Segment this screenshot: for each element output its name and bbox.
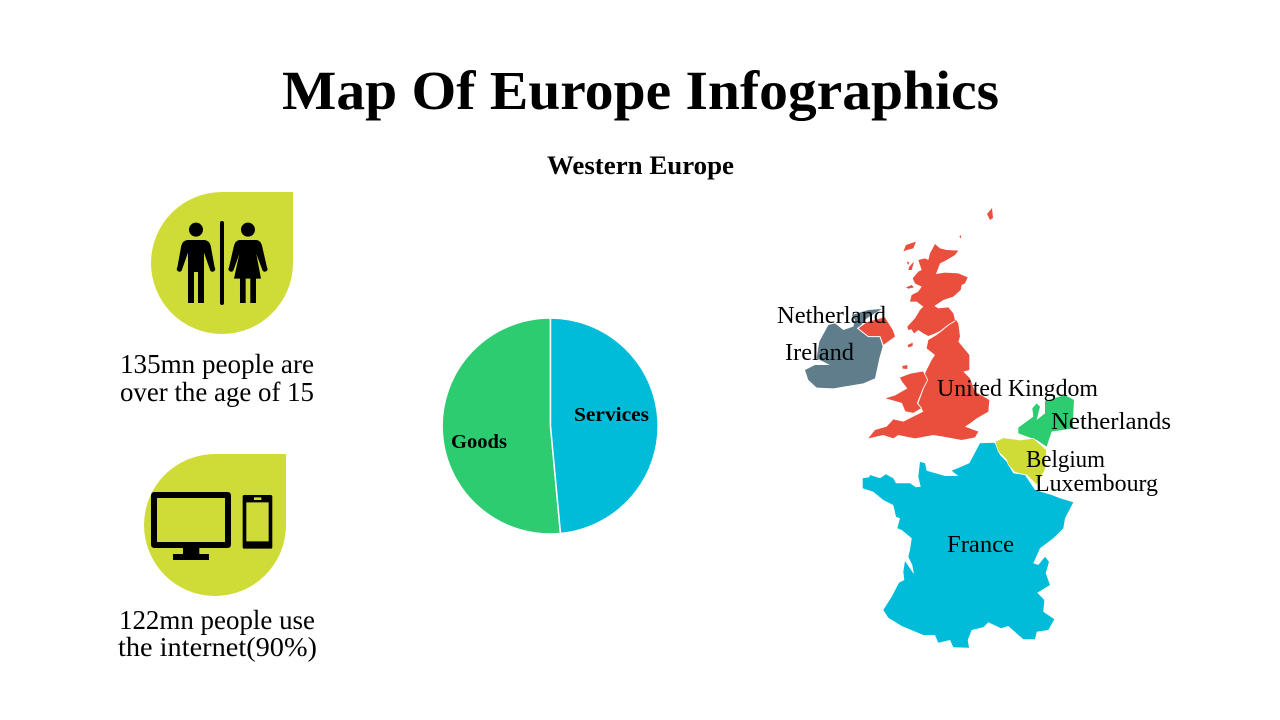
- label: services: Services: [574, 404, 649, 426]
- caption: age: [120, 349, 314, 407]
- caption: internet: [118, 605, 317, 662]
- pie chart: [442, 318, 658, 534]
- drop badge: people: [151, 192, 293, 334]
- map labels: France: [947, 532, 1014, 558]
- caption: age: over the age of 15: [120, 377, 314, 407]
- icon: monitor and phone: [151, 492, 272, 560]
- caption: age: 135mn people are: [120, 349, 314, 379]
- region: belgium and luxembourg: [995, 438, 1047, 485]
- map labels: Ireland: [785, 340, 854, 366]
- region: northern ireland: [858, 317, 896, 346]
- title: Map Of Europe Infographics: [282, 60, 999, 121]
- map of western europe: [777, 208, 1171, 648]
- slice: services: [550, 318, 658, 534]
- scotland and islands: [903, 235, 968, 336]
- map labels: United Kingdom: [937, 376, 1098, 402]
- drop badge: devices: [144, 454, 286, 596]
- caption: internet: the internet(90%): [118, 632, 317, 662]
- map labels: Netherlands: [1051, 409, 1171, 435]
- region: united kingdom: [868, 208, 993, 440]
- region: france: [863, 443, 1073, 648]
- icon: man and woman: [177, 221, 268, 305]
- region: netherlands: [1018, 395, 1074, 447]
- map labels: Luxembourg: [1035, 471, 1158, 497]
- map labels: Belgium: [1026, 447, 1105, 473]
- region: ireland: [805, 309, 883, 388]
- map labels: Netherland: [777, 303, 886, 329]
- label: goods: Goods: [451, 431, 507, 453]
- map labels: [777, 303, 1171, 558]
- subtitle: Western Europe: [547, 151, 734, 180]
- slice: goods: [442, 318, 560, 534]
- england and wales: [868, 320, 989, 440]
- caption: internet: 122mn people use: [119, 605, 315, 635]
- shetland: [987, 208, 993, 220]
